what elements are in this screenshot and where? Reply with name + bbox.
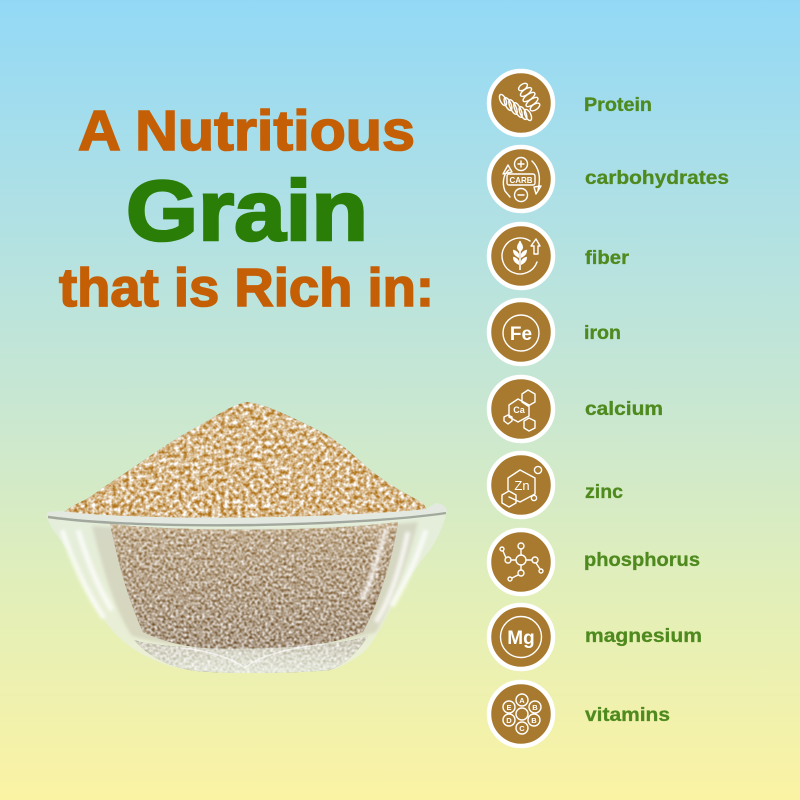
glass bowl of grain — [46, 402, 447, 673]
icon: vitamins ring: E — [506, 703, 512, 712]
nutrient: calcium — [489, 377, 663, 441]
icon: molecule — [489, 530, 553, 594]
icon: Mg — [489, 605, 553, 669]
nutrient: magnesium — [489, 605, 702, 669]
icon: vitamins ring: A — [519, 696, 525, 705]
nutrient: fiber — [489, 224, 629, 288]
icon: wheat with arrow — [489, 224, 553, 288]
grains inside bowl — [110, 522, 398, 650]
label: protein: Protein — [584, 94, 652, 116]
label: calcium: calcium — [585, 398, 663, 420]
nutrient: iron — [489, 300, 621, 364]
icon: Mg: Mg — [507, 628, 535, 649]
icon: carb cycle: CARB — [510, 175, 532, 185]
base flourish — [180, 644, 325, 668]
nutrient: zinc — [489, 453, 623, 517]
icon: vitamins ring: B — [531, 716, 537, 725]
title line: Grain: Grain — [126, 164, 368, 259]
icon: vitamins ring — [489, 682, 553, 746]
title line: A Nutritious: A Nutritious — [78, 99, 415, 163]
label: carbohydrates: carbohydrates — [585, 167, 729, 189]
glass highlights — [62, 530, 426, 622]
label: fiber: fiber — [585, 247, 629, 269]
label: phosphorus: phosphorus — [584, 549, 700, 571]
side reflection of grains — [92, 522, 418, 649]
label: iron: iron — [584, 322, 621, 344]
nutrient: vitamins — [489, 682, 670, 746]
icon: vitamins ring: D — [506, 716, 512, 725]
glass body — [46, 511, 447, 673]
title — [59, 99, 434, 318]
title line: that is Rich in: that is Rich in: — [59, 258, 434, 318]
grain mound — [63, 402, 428, 521]
icon: Fe: Fe — [510, 324, 532, 345]
nutrient: protein — [489, 71, 652, 135]
bowl rim — [46, 503, 447, 524]
icon: Ca hexagons — [489, 377, 553, 441]
icon: vitamins ring: C — [519, 724, 525, 733]
rim front edge — [48, 513, 446, 525]
label: magnesium: magnesium — [585, 625, 702, 647]
icon: carb cycle — [489, 147, 553, 211]
nutrient: phosphorus — [489, 530, 700, 594]
icon: Zn hexagons: Zn — [514, 478, 530, 493]
icon: Ca hexagons: Ca — [513, 405, 526, 415]
icon: vitamins ring: B — [532, 703, 538, 712]
glass base — [134, 636, 368, 673]
label: vitamins: vitamins — [585, 704, 670, 726]
icon: protein helix — [489, 71, 553, 135]
label: zinc: zinc — [585, 481, 623, 503]
nutrient: carbohydrates — [489, 147, 729, 211]
